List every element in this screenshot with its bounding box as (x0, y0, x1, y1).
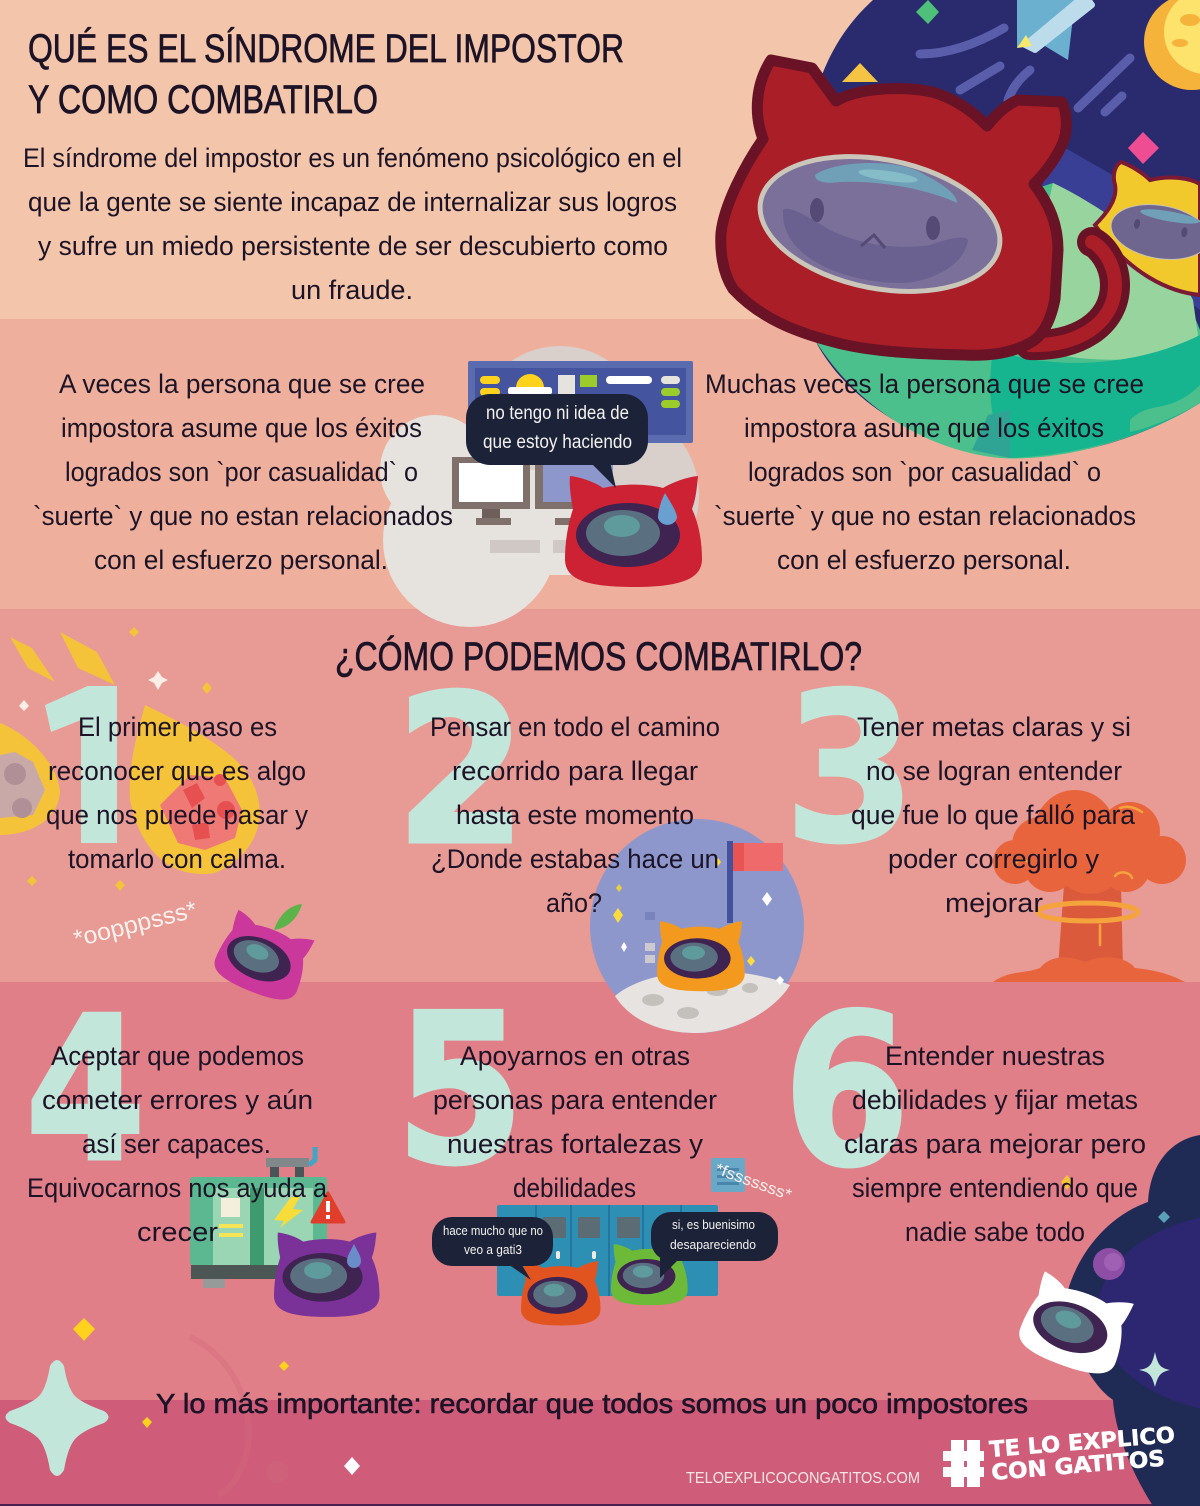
step 4 text: crecer (137, 1217, 218, 1247)
step 4 text (27, 1041, 328, 1247)
closing message: Y lo más importante: recordar que todos somos un poco impostores (156, 1388, 1028, 1419)
cat: orange (521, 1261, 600, 1326)
icon: purple planet (1093, 1248, 1125, 1280)
icon: pink diamond (1128, 132, 1159, 164)
icon: rocket (1017, 0, 1092, 60)
step 3 text (851, 712, 1136, 918)
caption: oopppsss: *oopppsss* (71, 896, 200, 953)
text block: intro: y sufre un miedo persistente de ser descubierto como (38, 231, 668, 261)
number 6: 6 (783, 969, 910, 1214)
step 4 text: Aceptar que podemos (51, 1041, 304, 1071)
speech bubble: right: si, es buenisimo (672, 1217, 755, 1232)
step 1 text (46, 712, 308, 874)
text block: left explanation: impostora asume que los éxitos (61, 413, 422, 443)
text block: left explanation: `suerte` y que no estan relacionados (33, 501, 453, 531)
illustration: office cloud with worried cat (380, 346, 702, 627)
text block: right explanation: con el esfuerzo personal. (777, 545, 1071, 575)
big numbers (32, 686, 902, 1168)
logo: hashtag brand (943, 1426, 1174, 1487)
cat: green (611, 1244, 688, 1305)
icon: sweat drop (347, 1244, 361, 1268)
text block: left explanation: con el esfuerzo personal. (94, 545, 388, 575)
sparkles (27, 627, 212, 891)
illustration: magenta cat with leaf (209, 904, 317, 1007)
step 5 text (433, 1041, 717, 1203)
text block: intro: El síndrome del impostor es un fenómeno psicológico en el (23, 143, 682, 173)
illustration: nebula with white cat (1013, 1135, 1200, 1506)
speech bubble: left: veo a gati3 (464, 1242, 522, 1257)
speech bubble: left (432, 1217, 553, 1280)
illustration: mushroom explosion (993, 790, 1186, 982)
step 2 text: año? (546, 888, 602, 918)
text block: intro (23, 143, 682, 305)
step 6 text (844, 1041, 1146, 1247)
icon: yellow star (842, 63, 878, 82)
website url: TELOEXPLICOCONGATITOS.COM (686, 1470, 920, 1487)
text block: left explanation (33, 369, 453, 575)
screen (468, 361, 693, 443)
illustration: generator with warning (190, 1147, 379, 1317)
cloud (380, 346, 699, 627)
step 2 text: hasta este momento (456, 800, 694, 830)
title (28, 26, 624, 122)
text block: right explanation: Muchas veces la persona que se cree (705, 369, 1144, 399)
step 6 text: claras para mejorar pero (844, 1129, 1146, 1159)
step 5 text: nuestras fortalezas y (447, 1129, 704, 1159)
step 2 text (430, 712, 720, 918)
cat: red worried (565, 476, 702, 587)
speech bubble: no tengo ni idea de (486, 403, 629, 424)
step 6 text: Entender nuestras (885, 1041, 1105, 1071)
decorative sparkles (73, 1175, 1073, 1495)
step 3 text: que fue lo que falló para (851, 800, 1136, 830)
speech bubble: que estoy haciendo (483, 432, 632, 453)
step 6 text: debilidades y fijar metas (852, 1085, 1138, 1115)
step 4 text: Equivocarnos nos ayuda a (27, 1173, 328, 1203)
icon: mint star (1139, 1352, 1170, 1387)
title: Y COMO COMBATIRLO (28, 78, 378, 122)
number 2: 2 (395, 651, 527, 891)
step 1 text: que nos puede pasar y (46, 800, 308, 830)
speech bubble (466, 394, 648, 488)
illustration: big mint star (6, 1360, 108, 1476)
text block: intro: un fraude. (291, 275, 413, 305)
illustration: moon landing cat (590, 819, 804, 1033)
step 2 text: Pensar en todo el camino (430, 712, 720, 742)
icon: green diamond (916, 0, 939, 24)
icon: lightning bolt (274, 1197, 303, 1228)
icon: vent (711, 1158, 745, 1192)
computer monitors (452, 457, 613, 553)
illustration: yellow astronaut cat (1095, 162, 1200, 295)
heading: como combatirlo: ¿CÓMO PODEMOS COMBATIRLO? (335, 634, 862, 679)
step 2 text: ¿Donde estabas hace un (431, 844, 719, 874)
step 1 text: El primer paso es (78, 712, 277, 742)
text block: intro: que la gente se siente incapaz de internalizar sus logros (28, 187, 677, 217)
step 4 text: así ser capaces. (82, 1129, 271, 1159)
text block: left explanation: logrados son `por casualidad` o (65, 457, 418, 487)
text block: right explanation (705, 369, 1144, 575)
text block: left explanation: A veces la persona que se cree (59, 369, 425, 399)
icon: moon (1144, 0, 1200, 90)
number 1: 1 (36, 635, 193, 897)
icon: teal diamond (1158, 1211, 1170, 1223)
step 1 text: tomarlo con calma. (68, 844, 286, 874)
cat: white (1013, 1270, 1137, 1382)
step 1 text: reconocer que es algo (48, 756, 306, 786)
step 6 text: siempre entendiendo que (852, 1173, 1138, 1203)
illustration: space scene with planet (803, 0, 1200, 458)
streaks (920, 28, 1130, 112)
caption: fsssss: *fsssssss* (713, 1161, 794, 1204)
step 3 text: no se logran entender (866, 756, 1122, 786)
step 3 text: mejorar (945, 888, 1043, 918)
step 5 text: Apoyarnos en otras (460, 1041, 690, 1071)
speech bubble: right (651, 1212, 778, 1278)
illustration: big red astronaut cat (721, 60, 1115, 355)
illustration: lockers with cats (432, 1158, 794, 1326)
logo: hashtag brand: CON GATITOS (990, 1447, 1166, 1486)
step 5 text: personas para entender (433, 1085, 717, 1115)
step 6 text: nadie sabe todo (905, 1217, 1085, 1247)
icon: warning triangle (312, 1193, 344, 1222)
step 2 text: recorrido para llegar (452, 756, 698, 786)
number 5: 5 (395, 970, 525, 1212)
logo: hashtag brand: TE LO EXPLICO (988, 1423, 1176, 1463)
speech bubble: right: desapareciendo (670, 1237, 756, 1252)
logo: hashtag brand: # (941, 1432, 975, 1501)
text block: right explanation: `suerte` y que no estan relacionados (714, 501, 1136, 531)
step 3 text: Tener metas claras y si (857, 712, 1131, 742)
step 5 text: debilidades (513, 1173, 636, 1203)
speech bubble: left: hace mucho que no (443, 1223, 543, 1238)
text block: right explanation: logrados son `por casualidad` o (748, 457, 1101, 487)
title: QUÉ ES EL SÍNDROME DEL IMPOSTOR (28, 26, 624, 71)
step 3 text: poder corregirlo y (888, 844, 1100, 874)
number 4: 4 (25, 974, 146, 1207)
text block: right explanation: impostora asume que los éxitos (744, 413, 1104, 443)
icon: sweat drop (658, 493, 677, 525)
illustration: falling meteors (0, 627, 260, 891)
step 4 text: cometer errores y aún (42, 1085, 313, 1115)
number 3: 3 (784, 649, 916, 889)
icon: flag (727, 841, 783, 923)
